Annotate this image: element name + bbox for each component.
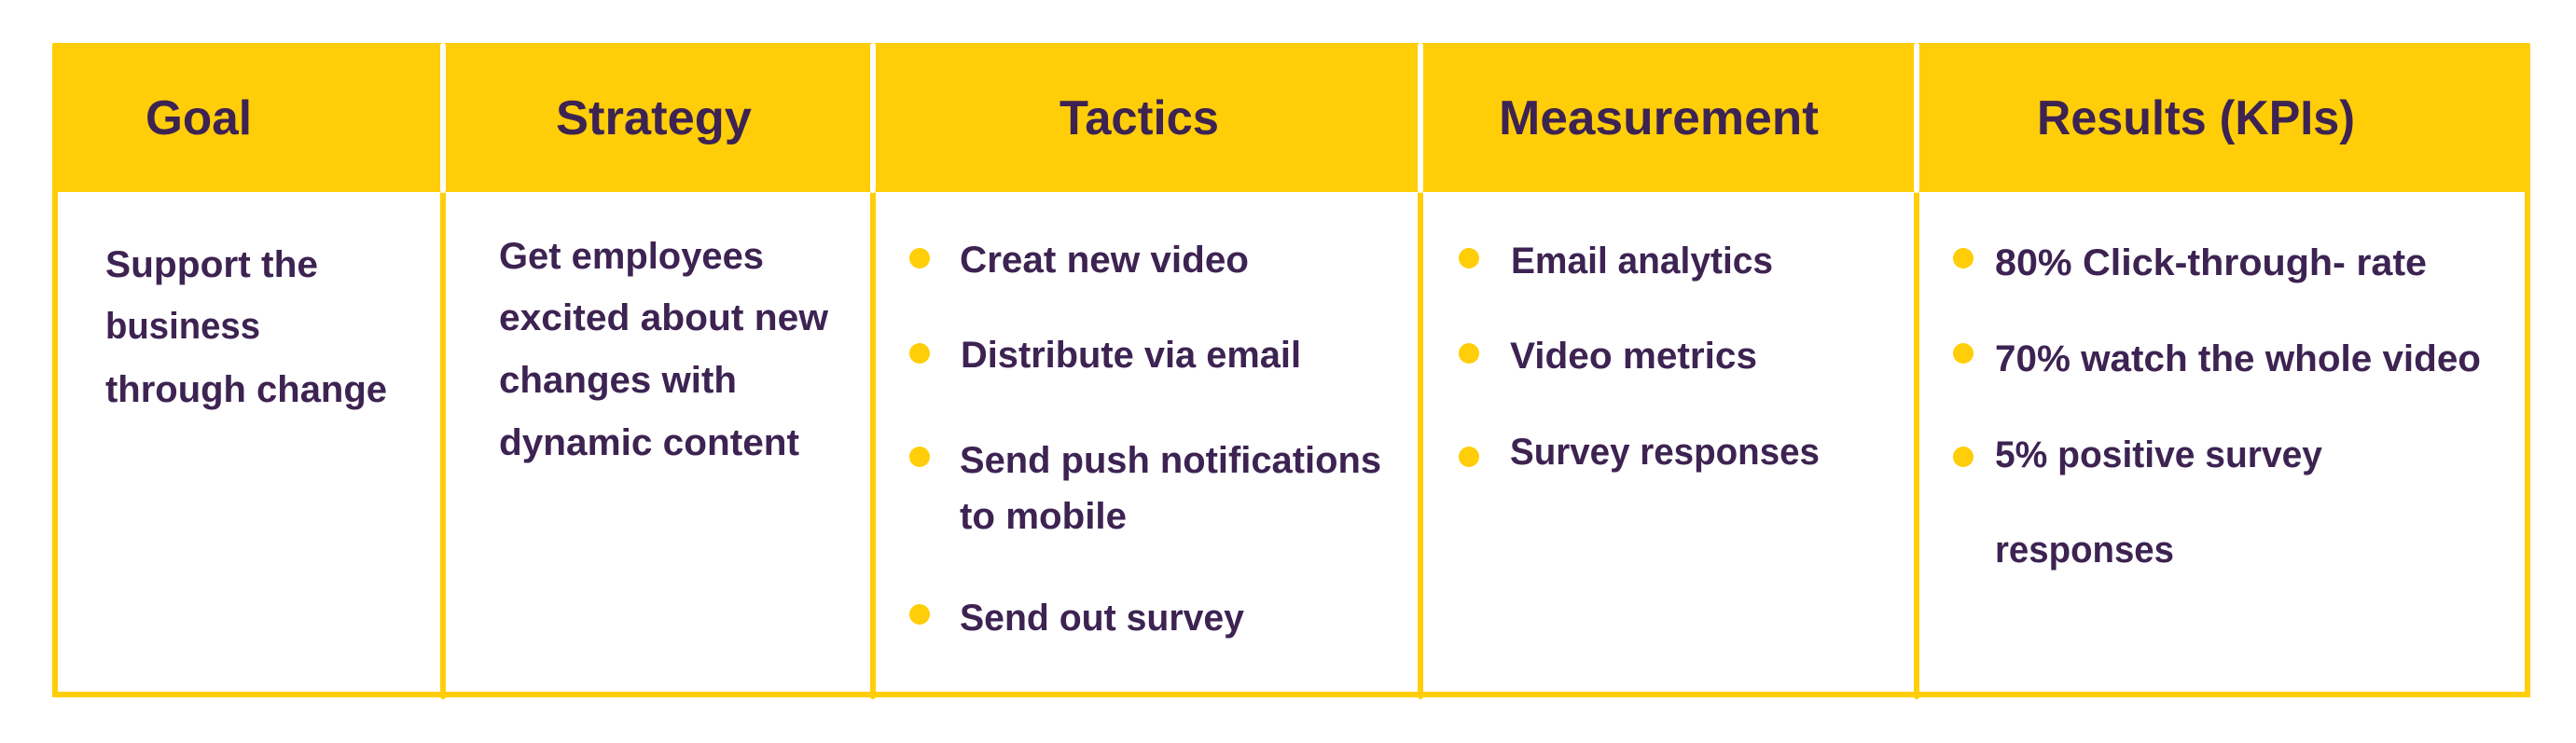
list item: positive survey responses: 5% positive survey xyxy=(1995,434,2323,475)
list item: survey responses: Survey responses xyxy=(1510,432,1820,473)
heading: tactics: Tactics xyxy=(1059,91,1219,145)
list item: watch the whole video: 70% watch the whole video xyxy=(1995,338,2481,379)
list item: email analytics: Email analytics xyxy=(1511,241,1773,282)
text block: strategy description: dynamic content xyxy=(499,422,799,463)
heading: measurement: Measurement xyxy=(1499,91,1819,145)
list item: click-through rate: 80% Click-through- rate xyxy=(1995,242,2427,283)
list item: positive survey responses: responses xyxy=(1995,530,2174,571)
list item: send push notifications: to mobile xyxy=(960,496,1127,537)
list item: creat new video: Creat new video xyxy=(960,240,1249,281)
text block: strategy description: Get employees xyxy=(499,236,764,277)
heading: strategy: Strategy xyxy=(556,91,752,145)
list item: distribute via email: Distribute via email xyxy=(961,335,1301,376)
text block: goal description: Support the xyxy=(105,244,318,285)
heading: results: Results (KPIs) xyxy=(2037,91,2355,145)
text block: goal description: through change xyxy=(105,369,387,410)
column: goal xyxy=(105,91,387,410)
list item: send push notifications: Send push notifications xyxy=(960,440,1381,481)
text block: goal description: business xyxy=(105,306,260,347)
list item: send push notifications xyxy=(909,440,1381,537)
text block: strategy description xyxy=(499,236,829,463)
column: tactics xyxy=(909,91,1381,639)
list item: send out survey: Send out survey xyxy=(960,598,1245,639)
list item: video metrics: Video metrics xyxy=(1510,336,1757,377)
text block: goal description xyxy=(105,244,387,410)
column: measurement xyxy=(1459,91,1820,473)
column: strategy xyxy=(499,91,829,463)
text block: strategy description: excited about new xyxy=(499,297,829,338)
heading: goal: Goal xyxy=(145,91,252,145)
column: results xyxy=(1953,91,2481,571)
text block: strategy description: changes with xyxy=(499,360,737,401)
list item: positive survey responses xyxy=(1953,434,2323,571)
